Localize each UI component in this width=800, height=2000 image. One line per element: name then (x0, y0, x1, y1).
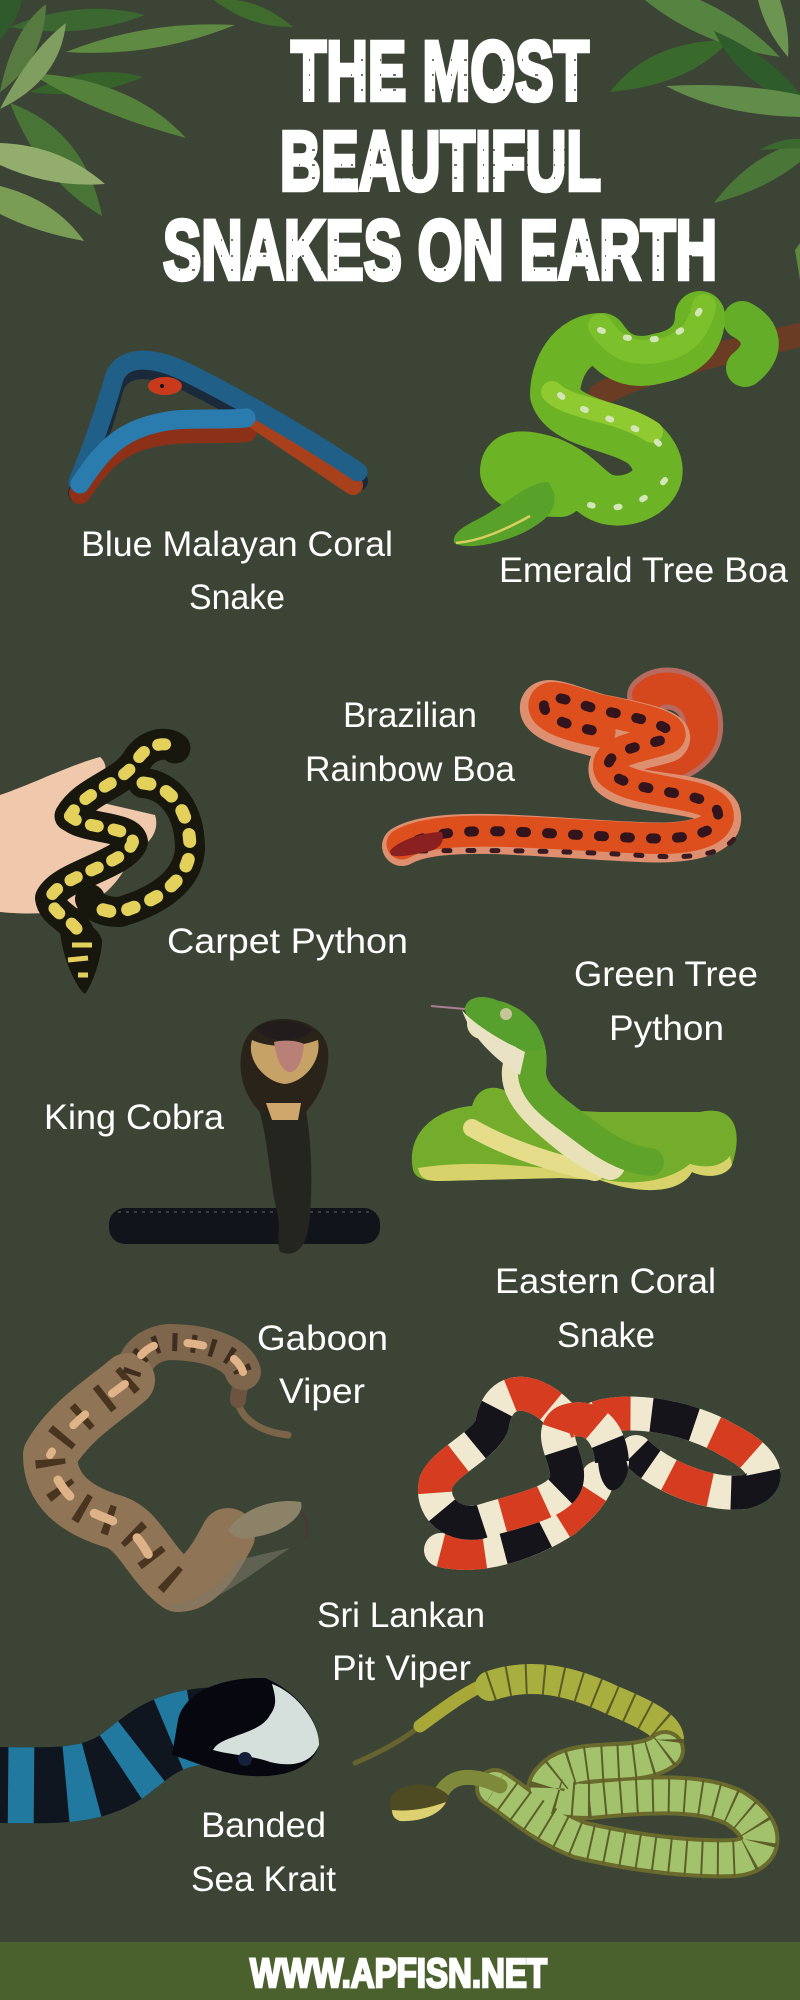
head (598, 1451, 628, 1490)
branch (600, 335, 800, 395)
label: banded sea krait: Sea Krait (191, 1860, 336, 1899)
snake: green tree python (412, 997, 737, 1190)
coiled body (412, 1088, 737, 1190)
snake: gaboon viper (50, 1342, 307, 1612)
label: green tree python: Python (609, 1009, 724, 1048)
neck (258, 1105, 311, 1254)
label: eastern coral snake: Snake (557, 1316, 655, 1355)
snake: banded sea krait (0, 1678, 319, 1785)
snake: eastern coral snake (435, 1394, 764, 1553)
label: banded sea krait: Banded (201, 1806, 326, 1845)
label: green tree python: Green Tree (574, 955, 758, 994)
label: brazilian rainbow boa: Brazilian (343, 696, 477, 735)
label: blue malayan coral snake (81, 525, 393, 617)
label: gaboon viper (257, 1319, 388, 1411)
label: eastern coral snake (495, 1262, 716, 1355)
leaves: top right cluster (610, 0, 800, 280)
label: emerald tree boa: Emerald Tree Boa (499, 551, 789, 590)
hand (0, 757, 156, 913)
label: sri lankan pit viper: Sri Lankan (317, 1596, 485, 1635)
label: carpet python: Carpet Python (167, 922, 408, 961)
leaves: top left cluster (0, 0, 293, 241)
footer website text: WWW.APFISN.NET (250, 1950, 547, 1996)
snake: brazilian rainbow boa (390, 688, 735, 857)
snake: sri lankan pit viper (355, 1679, 759, 1858)
tongue (431, 1006, 465, 1009)
label: blue malayan coral snake: Blue Malayan Coral (81, 525, 393, 564)
label: gaboon viper: Viper (279, 1372, 365, 1411)
title (160, 24, 720, 297)
footer bar (0, 1942, 800, 2000)
label: blue malayan coral snake: Snake (189, 578, 285, 617)
label: green tree python (574, 955, 758, 1048)
label: eastern coral snake: Eastern Coral (495, 1262, 716, 1301)
head (454, 482, 555, 546)
base coil (109, 1208, 380, 1244)
hood (240, 1019, 328, 1112)
snake: king cobra (109, 1019, 380, 1254)
title line 2: BEAUTIFUL (280, 114, 601, 208)
label: brazilian rainbow boa (305, 696, 516, 789)
label: sri lankan pit viper (317, 1596, 485, 1688)
head (172, 1678, 319, 1776)
label: brazilian rainbow boa: Rainbow Boa (305, 750, 516, 789)
title line 1: THE MOST (291, 24, 589, 118)
head (390, 1784, 448, 1820)
snake: blue malayan coral snake (78, 360, 358, 493)
label: gaboon viper: Gaboon (257, 1319, 388, 1358)
label: sri lankan pit viper: Pit Viper (332, 1649, 471, 1688)
head (228, 1501, 302, 1539)
label: king cobra: King Cobra (44, 1098, 225, 1137)
snake: emerald tree boa (454, 306, 800, 546)
neck and head (482, 1024, 610, 1165)
snake: carpet python in hand (0, 744, 190, 994)
label: banded sea krait (191, 1806, 336, 1899)
